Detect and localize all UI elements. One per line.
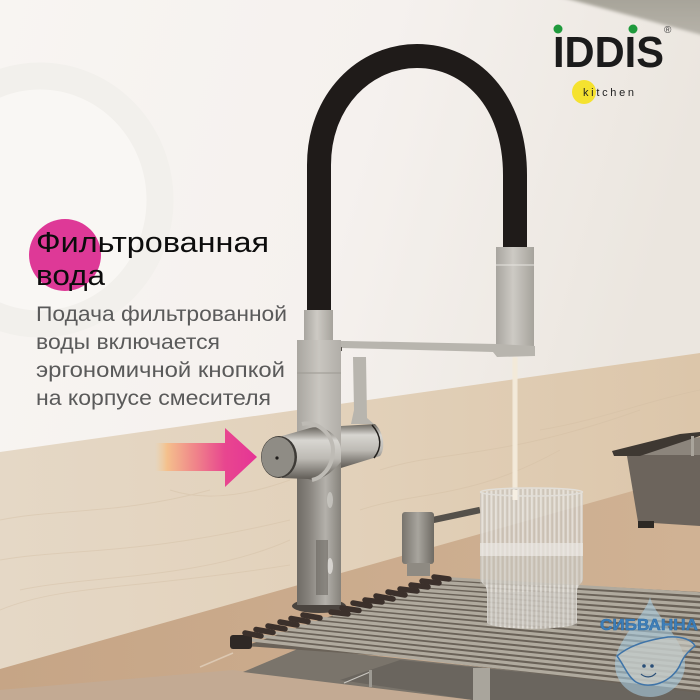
watermark (600, 597, 698, 697)
countertop (0, 472, 700, 700)
kitchen label: kitchen (583, 87, 634, 99)
logo (553, 24, 672, 104)
black flexible hose (319, 56, 515, 312)
registered mark: ® (664, 25, 672, 36)
mat feet (230, 577, 449, 649)
heading: Фильтрованная (36, 227, 269, 259)
yellow spot (572, 80, 596, 104)
water stream (512, 357, 518, 490)
vertical column (297, 340, 341, 605)
wood backsplash (0, 353, 700, 680)
sink drain rod (344, 670, 372, 687)
heading (36, 227, 269, 292)
faucet base flange (292, 599, 346, 613)
filtered water button (261, 436, 297, 478)
watermark bathtub (617, 637, 695, 685)
wall background (0, 0, 700, 500)
watermark droplet (615, 597, 685, 697)
glass with water (480, 488, 583, 629)
mat bars (252, 579, 700, 689)
logo green dots (554, 24, 638, 34)
description text: воды включается (36, 331, 220, 354)
watermark face (641, 665, 656, 677)
sink basin (243, 648, 700, 700)
right pull-out sleeve (496, 247, 534, 347)
description text: Подача фильтрованной (36, 303, 287, 326)
drying mat (245, 578, 700, 693)
tray on counter (612, 432, 700, 528)
description text: эргономичной кнопкой (36, 359, 285, 382)
front button cylinder (282, 427, 341, 480)
logo wordmark: IDDIS (553, 28, 664, 77)
right valve body (341, 424, 383, 468)
pink blob accent (29, 219, 101, 291)
description text: на корпусе смесителя (36, 387, 271, 410)
sink support bracket (473, 668, 490, 700)
watermark text: СИБВАННА (600, 617, 698, 634)
faucet (261, 56, 535, 605)
heading: вода (36, 260, 106, 292)
description text (36, 303, 287, 410)
arrow pointing at button (155, 428, 257, 487)
soap dispenser (402, 510, 480, 576)
left hose sleeve (304, 310, 333, 341)
horizontal spout (297, 340, 535, 357)
lever handle (351, 357, 374, 424)
